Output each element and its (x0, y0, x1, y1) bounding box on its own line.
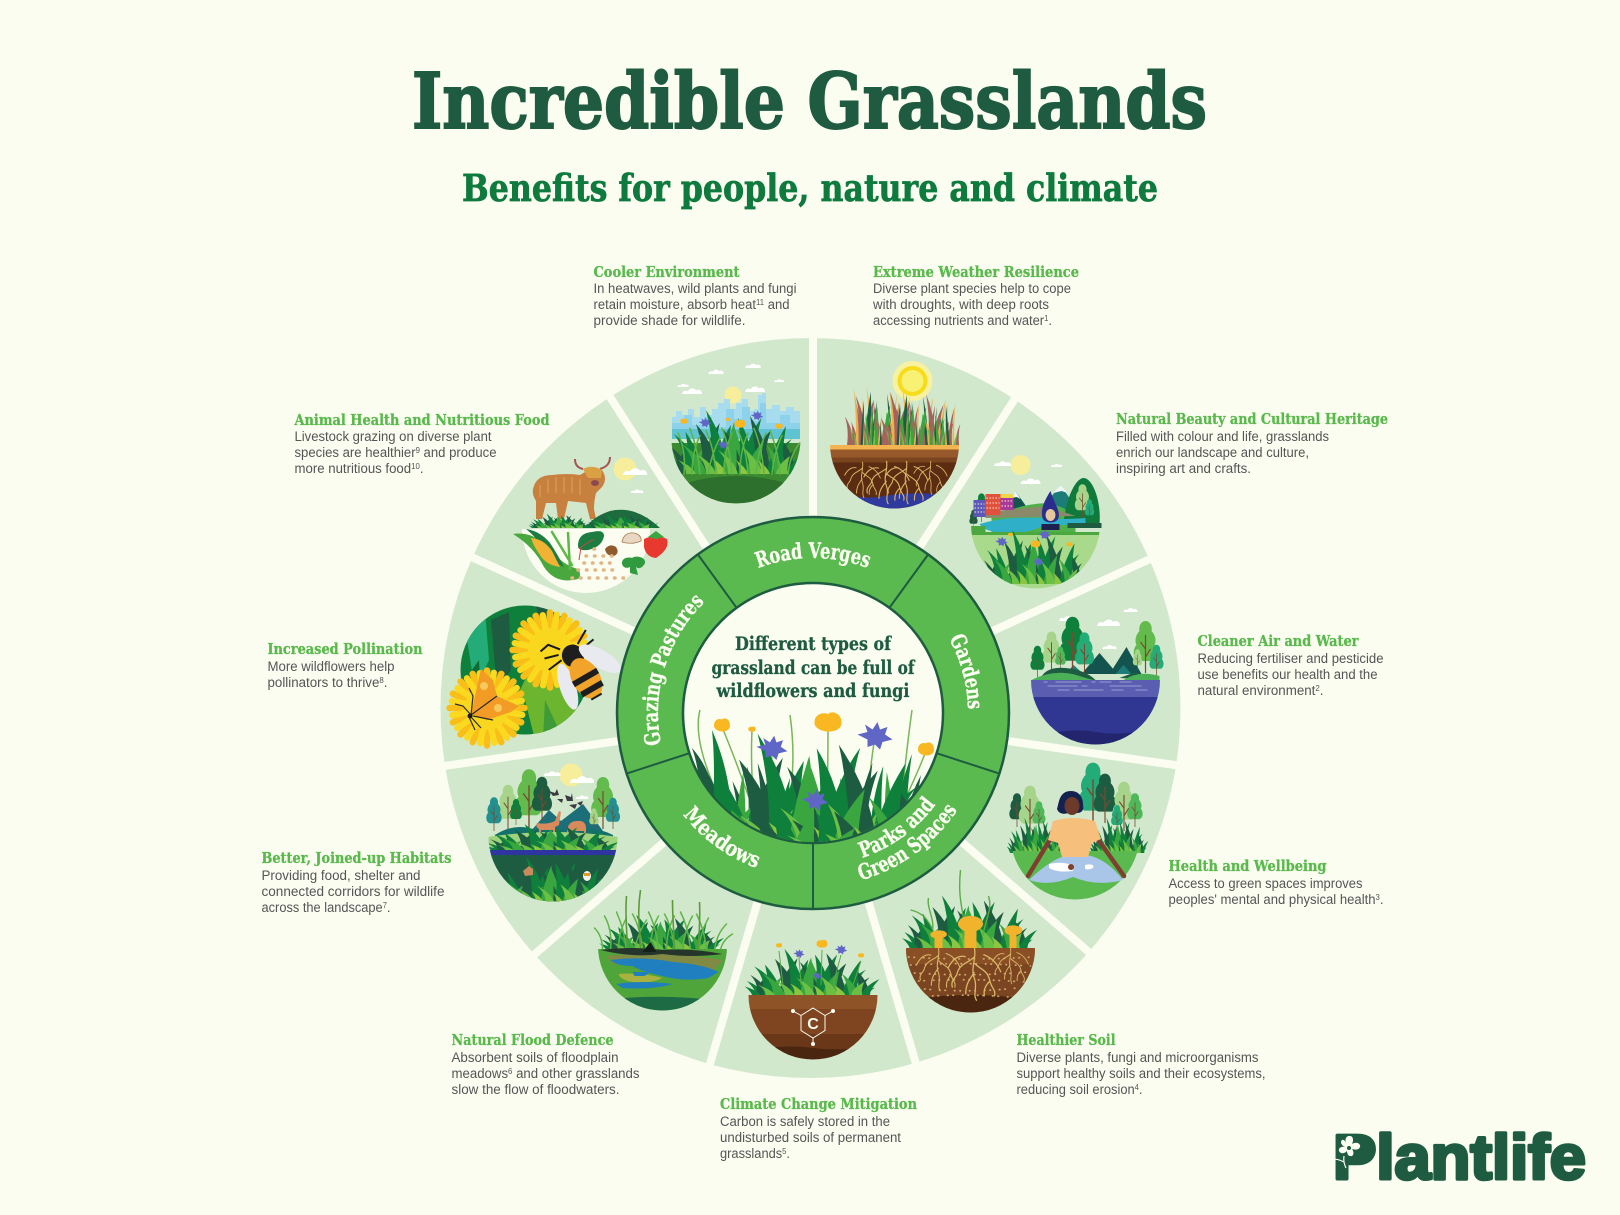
panel: centre circle (680, 583, 950, 852)
text: Health and Wellbeing (1168, 857, 1384, 907)
text: Increased Pollination: . (384, 675, 388, 690)
text: Natural Flood Defence: 6 (508, 1067, 513, 1076)
text: Cleaner Air and Water: . (1320, 683, 1324, 698)
icon: birds (549, 789, 583, 809)
text: Cleaner Air and Water (1198, 632, 1384, 698)
text: Cooler Environment: Cooler Environment (594, 263, 740, 281)
text: Increased Pollination: pollinators to thrive (268, 675, 381, 690)
text: Cooler Environment (594, 263, 796, 328)
text: Better, Joined-up Habitats: 7 (383, 901, 387, 910)
label: Parks and Green Spaces: Green Spaces (858, 804, 956, 880)
illustration: better joined-up habitats (485, 764, 620, 905)
text: Cleaner Air and Water: Cleaner Air and Water (1198, 632, 1359, 650)
text: Health and Wellbeing: Access to green spaces improves (1168, 876, 1363, 891)
text: Healthier Soil: reducing soil erosion (1016, 1082, 1140, 1097)
illustration: health and wellbeing (1007, 763, 1148, 903)
text: Better, Joined-up Habitats: Better, Joined-up Habitats (262, 849, 452, 867)
text: Healthier Soil: 4 (1135, 1083, 1139, 1092)
text: Better, Joined-up Habitats (262, 849, 452, 915)
text: Animal Health and Nutritious Food: . (420, 461, 424, 476)
label: Grazing Pastures: Grazing Pastures (642, 595, 704, 746)
text: Increased Pollination: 8 (379, 676, 384, 685)
text: Better, Joined-up Habitats: across the landscape (262, 900, 389, 915)
text: Cleaner Air and Water: 2 (1315, 684, 1320, 693)
text: Natural Flood Defence: meadows (452, 1066, 509, 1081)
text: Better, Joined-up Habitats: . (387, 900, 390, 915)
text: Health and Wellbeing: peoples' mental and physical health (1168, 892, 1382, 907)
text: Climate Change Mitigation: . (786, 1146, 790, 1161)
text: Cleaner Air and Water: use benefits our health and the (1198, 667, 1378, 682)
text: Natural Flood Defence: slow the flow of floodwaters. (452, 1082, 620, 1097)
text: Cooler Environment: provide shade for wildlife. (594, 313, 746, 328)
text: Climate Change Mitigation: Carbon is safely stored in the (720, 1114, 890, 1129)
label: Meadows: Meadows (683, 804, 760, 868)
text: Natural Beauty and Cultural Heritage: Natural Beauty and Cultural Heritage (1116, 410, 1388, 428)
illustration: cooler environment (672, 364, 800, 504)
text: Healthier Soil: . (1139, 1082, 1142, 1097)
illustration: wildflowers and grasses (692, 710, 934, 842)
text: Healthier Soil: Healthier Soil (1016, 1031, 1116, 1049)
illustration: natural flood defence (594, 890, 732, 1013)
logo: Plantlife: Plantlife (1333, 1123, 1586, 1193)
text: Natural Flood Defence: Absorbent soils of floodplain (452, 1050, 618, 1065)
illustration: cleaner air and water (1030, 608, 1164, 747)
text: Animal Health and Nutritious Food: species are healthier (294, 445, 419, 460)
text: Cooler Environment: 11 (756, 298, 765, 307)
illustration: extreme weather resilience (830, 361, 960, 514)
text: Animal Health and Nutritious Food: 10 (411, 462, 420, 471)
text block: centre message: grassland can be full of (712, 657, 916, 679)
illustration: animal health and nutritious food (513, 457, 668, 593)
corn (513, 529, 580, 580)
text: Extreme Weather Resilience: Diverse plant species help to cope (873, 281, 1071, 296)
text: Extreme Weather Resilience: . (1048, 313, 1052, 328)
dandelion top (508, 608, 592, 692)
cow (533, 457, 610, 519)
text: Extreme Weather Resilience (872, 263, 1079, 328)
label: Gardens: Gardens (951, 634, 980, 709)
text: Better, Joined-up Habitats: connected corridors for wildlife (262, 884, 444, 899)
text: Extreme Weather Resilience: accessing nutrients and water (873, 313, 1052, 328)
text: Natural Flood Defence (452, 1031, 640, 1097)
dandelion bottom (445, 666, 529, 750)
text: Extreme Weather Resilience: with droughts, with deep roots (872, 297, 1049, 312)
text block: centre message: Different types of (735, 633, 893, 655)
text: Health and Wellbeing: 3 (1376, 893, 1380, 902)
text: Natural Beauty and Cultural Heritage: inspiring art and crafts. (1116, 461, 1251, 476)
icon: flower on logo (1327, 1135, 1367, 1168)
label: Parks and Green Spaces: Parks and (857, 795, 936, 858)
subtitle: Benefits for people, nature and climate (462, 166, 1158, 210)
text: Health and Wellbeing: Health and Wellbeing (1168, 857, 1327, 875)
text: Increased Pollination: Increased Pollination (268, 640, 423, 658)
illustration: natural beauty and cultural heritage (966, 455, 1106, 595)
icon: carbon hexagon: C (807, 1016, 819, 1033)
text: Natural Beauty and Cultural Heritage: enrich our landscape and culture, (1116, 445, 1309, 460)
butterfly (455, 669, 519, 730)
text: Increased Pollination (268, 640, 423, 690)
text: Healthier Soil: Diverse plants, fungi and microorganisms (1016, 1050, 1259, 1065)
text block: centre message (712, 633, 916, 702)
text: Animal Health and Nutritious Food: Livestock grazing on diverse plant (294, 429, 492, 444)
text: Cooler Environment: retain moisture, absorb heat (594, 297, 762, 312)
text: Cooler Environment: In heatwaves, wild plants and fungi (594, 281, 796, 296)
text: Natural Beauty and Cultural Heritage: Filled with colour and life, grasslands (1116, 429, 1329, 444)
text: Extreme Weather Resilience: 1 (1044, 314, 1049, 323)
text: Animal Health and Nutritious Food: 9 (416, 446, 420, 455)
text: Cleaner Air and Water: natural environment (1198, 683, 1317, 698)
text: Healthier Soil (1016, 1031, 1266, 1097)
text: Natural Beauty and Cultural Heritage (1116, 410, 1388, 476)
chard (578, 531, 604, 550)
text block: centre message: wildflowers and fungi (716, 680, 910, 702)
label: Road Verges: Road Verges (754, 542, 870, 568)
strawberry (644, 536, 668, 558)
text: Healthier Soil: support healthy soils and their ecosystems, (1016, 1066, 1266, 1081)
text: Animal Health and Nutritious Food: more nutritious food (294, 461, 414, 476)
text: Better, Joined-up Habitats: Providing food, shelter and (262, 868, 420, 883)
illustration: healthier soil (902, 870, 1037, 1014)
mushrooms (605, 545, 618, 556)
text: Climate Change Mitigation: grasslands (720, 1146, 785, 1161)
broccoli (622, 557, 645, 575)
text: Health and Wellbeing: . (1380, 892, 1384, 907)
text: Animal Health and Nutritious Food: Animal Health and Nutritious Food (294, 411, 550, 429)
text: Animal Health and Nutritious Food: and produce (420, 445, 496, 460)
text: Increased Pollination: More wildflowers help (268, 659, 394, 674)
text: Climate Change Mitigation: Climate Change Mitigation (720, 1095, 917, 1113)
text: Climate Change Mitigation (720, 1095, 917, 1161)
illustration: climate change mitigation (745, 940, 880, 1061)
illustration: increased pollination (446, 606, 621, 749)
text: Natural Flood Defence: Natural Flood Defence (452, 1031, 614, 1049)
panel: inner ring of grassland types (616, 516, 1010, 910)
panel: outer wheel of eleven benefit segments (417, 313, 1209, 1097)
asparagus (552, 532, 572, 569)
text: Extreme Weather Resilience: Extreme Weather Resilience (873, 263, 1079, 281)
grains (572, 549, 624, 578)
bee (534, 616, 634, 715)
text: Cleaner Air and Water: Reducing fertiliser and pesticide (1198, 651, 1384, 666)
text: Animal Health and Nutritious Food (294, 411, 550, 476)
title: Incredible Grasslands (412, 57, 1207, 147)
text: Climate Change Mitigation: 5 (782, 1147, 787, 1156)
text: Cooler Environment: and (764, 297, 790, 312)
text: Natural Flood Defence: and other grasslands (512, 1066, 640, 1081)
text: Climate Change Mitigation: undisturbed soils of permanent (720, 1130, 901, 1145)
